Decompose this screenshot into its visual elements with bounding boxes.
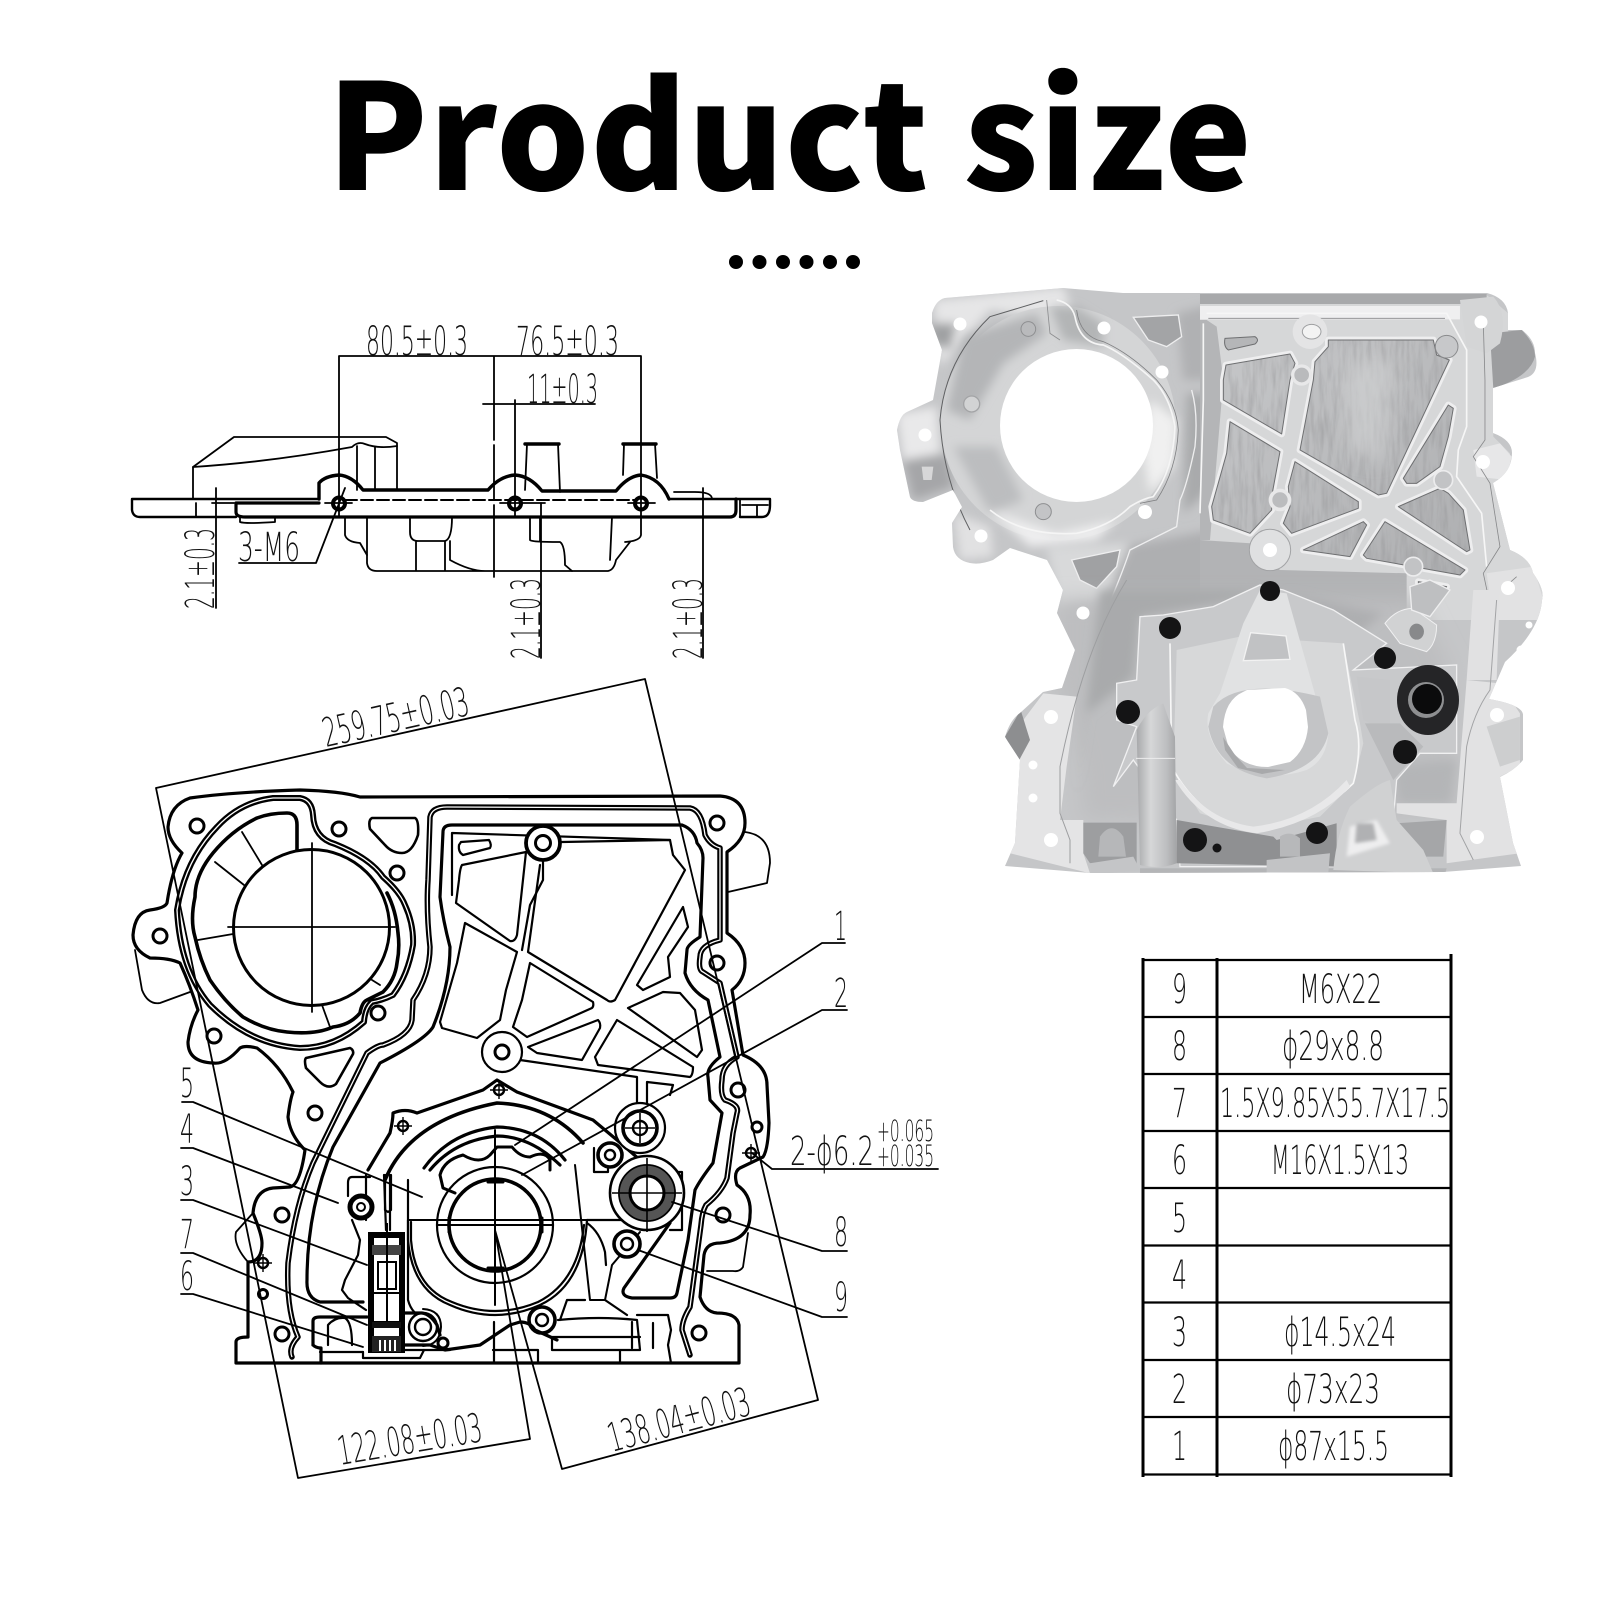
callout numbers: 4 [180, 1107, 194, 1153]
dimension 3-M6: 3-M6 [238, 525, 300, 571]
row 8 [1172, 1024, 1384, 1070]
row 9 [1172, 967, 1382, 1013]
flange disc [941, 306, 1176, 541]
seal long [288, 807, 738, 1357]
dimension 259.75: 259.75±0.03 [318, 679, 474, 757]
table grid [1143, 960, 1451, 1474]
side tabs [135, 832, 770, 1271]
black bolts [1116, 581, 1417, 852]
callout numbers: 1 [834, 904, 847, 950]
pockets [1212, 340, 1470, 608]
boss nine [614, 1231, 640, 1257]
row 5: 5 [1172, 1196, 1187, 1242]
left bolt and bracket [342, 1175, 425, 1318]
upper right: rib frame [1200, 294, 1543, 620]
row 7 [1172, 1081, 1450, 1127]
dimension left 2.1: 2.1±0.3 [178, 528, 224, 609]
callout numbers [180, 904, 848, 1321]
row 9: M6X22 [1299, 967, 1382, 1013]
dimension and leader lines [156, 679, 938, 1478]
bottom ledge [1083, 823, 1137, 867]
body outline [133, 790, 769, 1363]
boss top [526, 826, 560, 860]
seal bore [177, 798, 413, 1048]
callout numbers: 6 [180, 1254, 194, 1300]
row 1: ϕ87x15.5 [1278, 1424, 1389, 1470]
product photo: aluminium timing cover [897, 287, 1543, 875]
title: Product size [327, 20, 1252, 233]
lug [1385, 608, 1437, 652]
bore inner [192, 813, 399, 1033]
tolerance lower: +0.035 [877, 1139, 934, 1173]
frame lines [1200, 313, 1487, 567]
row 4: 4 [1172, 1253, 1187, 1299]
row 8: 8 [1172, 1024, 1187, 1070]
dimension right 2.1: 2.1±0.3 [666, 578, 712, 659]
side view drawing: 11±0.3 [527, 367, 598, 413]
row 2: ϕ73x23 [1286, 1367, 1380, 1413]
upper left: flange around large bore [897, 288, 1200, 601]
gasket holes [153, 816, 762, 1348]
spline shadow [1223, 737, 1285, 774]
callout numbers: 9 [834, 1275, 848, 1321]
bore centre lines and spokes [198, 832, 395, 1027]
row 3: ϕ14.5x24 [1284, 1310, 1396, 1356]
row 6: M16X1.5X13 [1271, 1138, 1409, 1184]
parts table [1143, 954, 1451, 1477]
bolt ring lower left [423, 1309, 441, 1346]
dimension 122.08: 122.08±0.03 [334, 1405, 486, 1475]
casting silhouette [897, 288, 1543, 873]
callout numbers: 8 [834, 1210, 848, 1256]
small boss [598, 1143, 622, 1167]
row 7: 7 [1172, 1081, 1187, 1127]
plunger tube [1137, 703, 1177, 867]
boss centre [482, 1032, 522, 1072]
side view drawing [132, 319, 770, 659]
rubber oil seal [1397, 665, 1459, 735]
bosses [1293, 314, 1327, 349]
oval pockets near flange [1133, 315, 1182, 347]
dimension middle 2.1: 2.1±0.3 [504, 578, 550, 659]
cover bolts [254, 1081, 760, 1341]
row 6 [1172, 1138, 1409, 1184]
callout numbers: 5 [180, 1061, 194, 1107]
row 3: 3 [1172, 1310, 1187, 1356]
row 2: 2 [1172, 1367, 1187, 1413]
callout numbers: 7 [180, 1212, 194, 1258]
decorative dot row [729, 255, 860, 269]
tolerance upper: +0.065 [877, 1114, 934, 1148]
oil seal [610, 1156, 684, 1232]
lower bore [1223, 688, 1308, 767]
large bore [1000, 349, 1153, 502]
pump plunger column [363, 1223, 424, 1358]
lower section [1005, 580, 1520, 875]
dimension 76.5: 76.5±0.3 [516, 319, 619, 365]
dark right tab [1490, 330, 1535, 388]
dimension 2-phi6.2: 2-ϕ6.2 [790, 1129, 874, 1175]
small shapes near bore [305, 818, 418, 1087]
rib pockets [440, 833, 702, 1105]
right outlet boss [1333, 805, 1432, 872]
cover and pump housing [368, 1080, 682, 1315]
row 1: 1 [1172, 1424, 1187, 1470]
dimension 80.5: 80.5±0.3 [366, 319, 468, 365]
front view drawing [133, 679, 938, 1478]
row 2 [1172, 1367, 1380, 1413]
row 1 [1172, 1424, 1389, 1470]
row 8: ϕ29x8.8 [1282, 1024, 1384, 1070]
dimples [1021, 322, 1036, 336]
pump cover [1113, 585, 1457, 867]
callout numbers: 3 [180, 1159, 194, 1205]
row 3 [1172, 1310, 1396, 1356]
boss with cross [615, 1103, 665, 1153]
row 9: 9 [1172, 967, 1187, 1013]
window line [307, 825, 722, 1302]
bright outer plate areas [1010, 693, 1090, 873]
dimension 138.04: 138.04±0.03 [603, 1379, 756, 1462]
row 6: 6 [1172, 1138, 1187, 1184]
lower block [313, 1300, 671, 1363]
mounting holes [918, 316, 1532, 847]
callout numbers: 2 [834, 971, 848, 1017]
